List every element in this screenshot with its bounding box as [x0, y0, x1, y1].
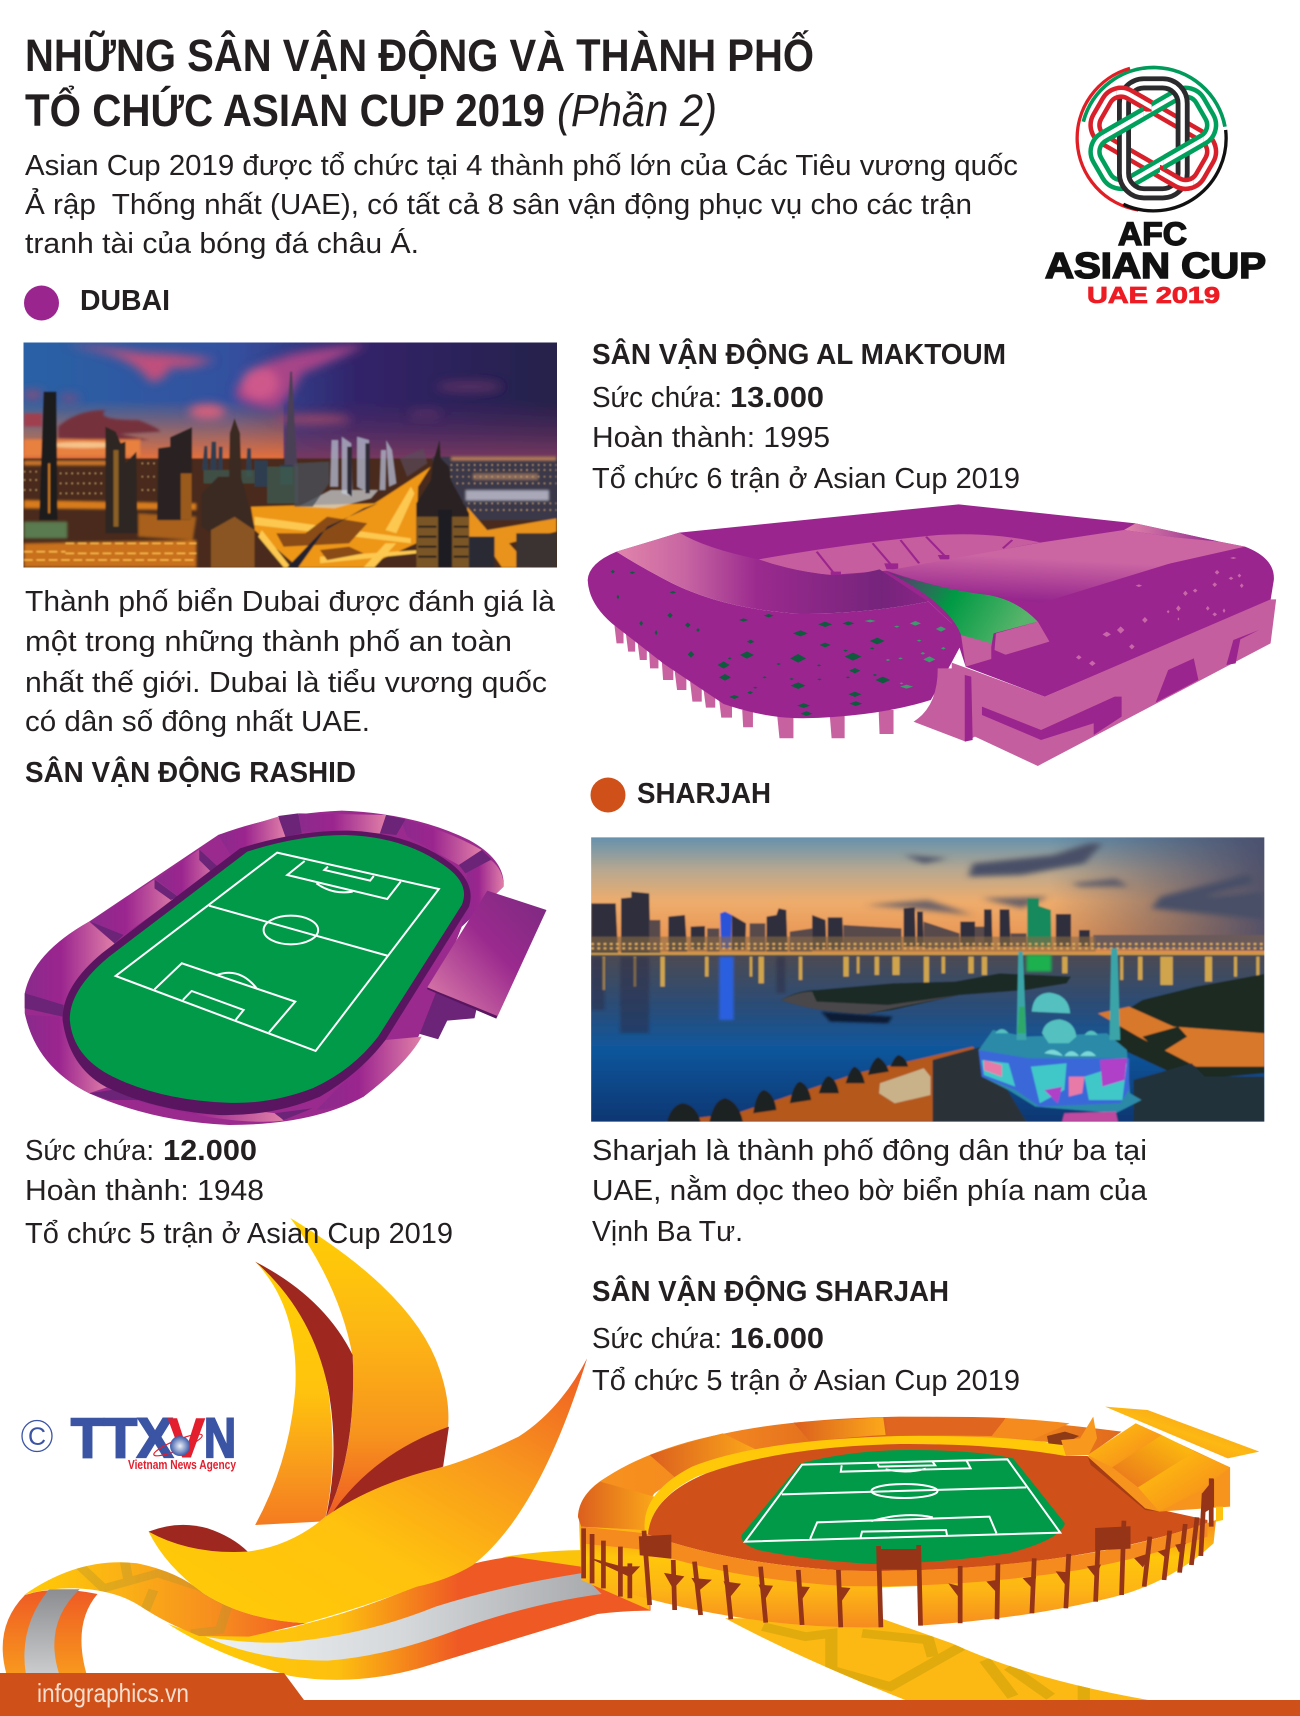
ribbon: yellow band behind stadium — [502, 1550, 589, 1577]
right stand — [427, 891, 546, 1017]
ribbon hex pattern — [763, 1627, 1084, 1700]
city base — [18, 458, 564, 570]
base details — [965, 630, 1259, 742]
bird head — [149, 1525, 248, 1552]
island — [781, 973, 1071, 1014]
city lights — [24, 463, 556, 510]
stadium pillars — [584, 1478, 1214, 1627]
section marker: Dubai: DUBAI — [80, 285, 170, 317]
text: Sharjah description: Vịnh Ba Tư. — [592, 1216, 743, 1248]
illustration: Al Maktoum stadium — [588, 504, 1276, 766]
ring dark connectors — [25, 813, 492, 1120]
stadium front rim band — [581, 1523, 1207, 1586]
front-left roof band — [617, 533, 928, 614]
palm trees — [667, 1055, 908, 1122]
pale windows — [1076, 557, 1244, 666]
panel: Al Maktoum stadium facts: Hoàn thành: 1995 — [592, 422, 830, 454]
text: Dubai description: nhất thế giới. Dubai là tiểu vương quốc — [25, 667, 547, 699]
decorative sail and ribbon artwork — [3, 1218, 651, 1680]
header: intro paragraph — [25, 150, 1018, 260]
header: title: (Phần 2) — [557, 85, 717, 136]
illustration: Rashid stadium — [25, 811, 546, 1125]
logo wordmark — [1045, 216, 1266, 308]
footer band — [0, 1673, 1300, 1716]
ribbon: lower sweep — [168, 1557, 651, 1680]
text: Sharjah description: UAE, nằm dọc theo bờ biển phía nam của — [592, 1174, 1148, 1207]
panel: Sharjah stadium facts: Sức chứa: — [592, 1323, 722, 1355]
sail: left — [255, 1262, 332, 1525]
pink base — [914, 599, 1276, 766]
text: Dubai description — [25, 586, 556, 738]
panel: Al Maktoum stadium facts: SÂN VẬN ĐỘNG AL MAKTOUM — [592, 337, 1006, 371]
ribbon: upper left band — [24, 1562, 306, 1637]
logo: TTXVN news agency — [22, 1406, 236, 1472]
logo ball — [1077, 64, 1227, 212]
inner stands — [759, 534, 1040, 575]
logo wordmark: AFC — [1118, 216, 1187, 252]
logo wordmark: ASIAN CUP — [1045, 245, 1266, 286]
text: Dubai description: một trong những thành phố an toàn — [25, 626, 512, 658]
logo wordmark: UAE 2019 — [1087, 282, 1220, 308]
stadium: Sharjah — [578, 1407, 1259, 1627]
copyright mark: C — [28, 1423, 46, 1451]
Rashid facts: Tổ chức 5 trận ở Asian Cup 2019 — [25, 1218, 453, 1250]
ring segments — [25, 813, 504, 1122]
stadium silhouette — [617, 504, 1271, 697]
stadium yellow rim — [645, 1436, 1066, 1537]
logo: AFC Asian Cup UAE 2019 — [1045, 64, 1266, 308]
bird body — [149, 1358, 587, 1623]
panel: Sharjah stadium facts: Tổ chức 5 trận ở Asian Cup 2019 — [592, 1365, 1020, 1397]
Rashid facts: Hoàn thành: 1948 — [25, 1175, 264, 1207]
pitch lines — [116, 853, 439, 1051]
header: title: TỔ CHỨC ASIAN CUP 2019 — [25, 85, 545, 136]
dark towers — [39, 392, 57, 520]
panel: Sharjah stadium facts: 16.000 — [730, 1323, 824, 1355]
faded green windows — [865, 620, 946, 689]
header: intro paragraph: Ả rập Thống nhất (UAE), có tất cả 8 sân vận động phục vụ cho các trận — [25, 187, 972, 221]
green notch — [887, 572, 1038, 647]
legs — [614, 623, 894, 738]
stadium upper ring — [578, 1417, 1122, 1530]
back right strip — [1124, 523, 1219, 542]
green windows — [610, 570, 890, 716]
outer ring — [25, 811, 504, 1125]
inner dark ring — [63, 831, 471, 1115]
header: title: NHỮNG SÂN VẬN ĐỘNG VÀ THÀNH PHỐ — [25, 30, 814, 81]
panel: Al Maktoum stadium facts — [592, 337, 1020, 495]
sail: dark red lower — [332, 1427, 449, 1513]
panel: Sharjah stadium facts: SÂN VẬN ĐỘNG SHARJAH — [592, 1274, 949, 1308]
stadium front wall — [581, 1520, 1216, 1627]
Rashid facts — [25, 1135, 453, 1250]
header: title — [25, 30, 814, 136]
agency wordmark: V — [168, 1406, 205, 1469]
text: Sharjah description — [592, 1135, 1148, 1248]
ribbon: left arc — [3, 1589, 98, 1673]
ribbon pattern — [79, 1560, 228, 1633]
right wall — [966, 547, 1274, 697]
stadium pitch — [741, 1450, 1065, 1564]
agency wordmark: N — [204, 1406, 236, 1469]
sail: right — [290, 1218, 448, 1518]
foreground shore — [665, 1047, 1026, 1122]
right roof band — [887, 530, 1245, 603]
water — [584, 955, 1272, 1125]
panel: Al Maktoum stadium facts: 13.000 — [730, 382, 824, 414]
panel: Rashid stadium — [25, 755, 546, 1250]
header: intro paragraph: tranh tài của bóng đá châu Á. — [25, 227, 419, 260]
stadium right stand — [1047, 1407, 1259, 1522]
panel: Al Maktoum stadium facts: Sức chứa: — [592, 382, 722, 414]
copyright mark — [22, 1420, 52, 1452]
photo: Dubai skyline — [18, 340, 564, 570]
ribbon: grey strip — [205, 1573, 602, 1661]
text: Dubai description: có dân số đông nhất UAE. — [25, 706, 370, 738]
far skyline — [1093, 935, 1272, 948]
footer site name: infographics.vn — [37, 1678, 189, 1708]
section marker: Sharjah — [590, 778, 771, 812]
agency wordmark: Vietnam News Agency — [128, 1458, 236, 1472]
section marker: Dubai — [24, 285, 170, 320]
agency wordmark: TTX — [71, 1406, 173, 1469]
right shore — [1116, 974, 1264, 1080]
panel: Sharjah stadium facts — [592, 1274, 1020, 1397]
panel: Al Maktoum stadium facts: Tổ chức 6 trận ở Asian Cup 2019 — [592, 463, 1020, 495]
ribbon: lower yellow band — [725, 1618, 1152, 1701]
pink boxes — [961, 622, 1049, 667]
sail: dark red middle — [255, 1262, 353, 1518]
pitch grass — [70, 835, 464, 1103]
heading: Rashid: SÂN VẬN ĐỘNG RASHID — [25, 755, 356, 789]
agency wordmark — [71, 1406, 236, 1472]
header: intro paragraph: Asian Cup 2019 được tổ chức tại 4 thành phố lớn của Các Tiêu vương quốc — [25, 150, 1018, 182]
Rashid facts: 12.000 — [163, 1135, 257, 1167]
text: Dubai description: Thành phố biển Dubai được đánh giá là — [25, 586, 556, 618]
stadium track — [645, 1444, 1207, 1571]
stadium left wall backing — [579, 1515, 650, 1610]
front-left wall — [588, 552, 962, 718]
section marker: Sharjah: SHARJAH — [637, 778, 771, 810]
right stand support — [385, 987, 476, 1039]
text: Sharjah description: Sharjah là thành phố đông dân thứ ba tại — [592, 1135, 1147, 1167]
Rashid facts: Sức chứa: — [25, 1135, 154, 1167]
roads — [251, 467, 431, 567]
photo: Sharjah skyline — [584, 833, 1272, 1125]
mosque — [979, 1030, 1142, 1113]
